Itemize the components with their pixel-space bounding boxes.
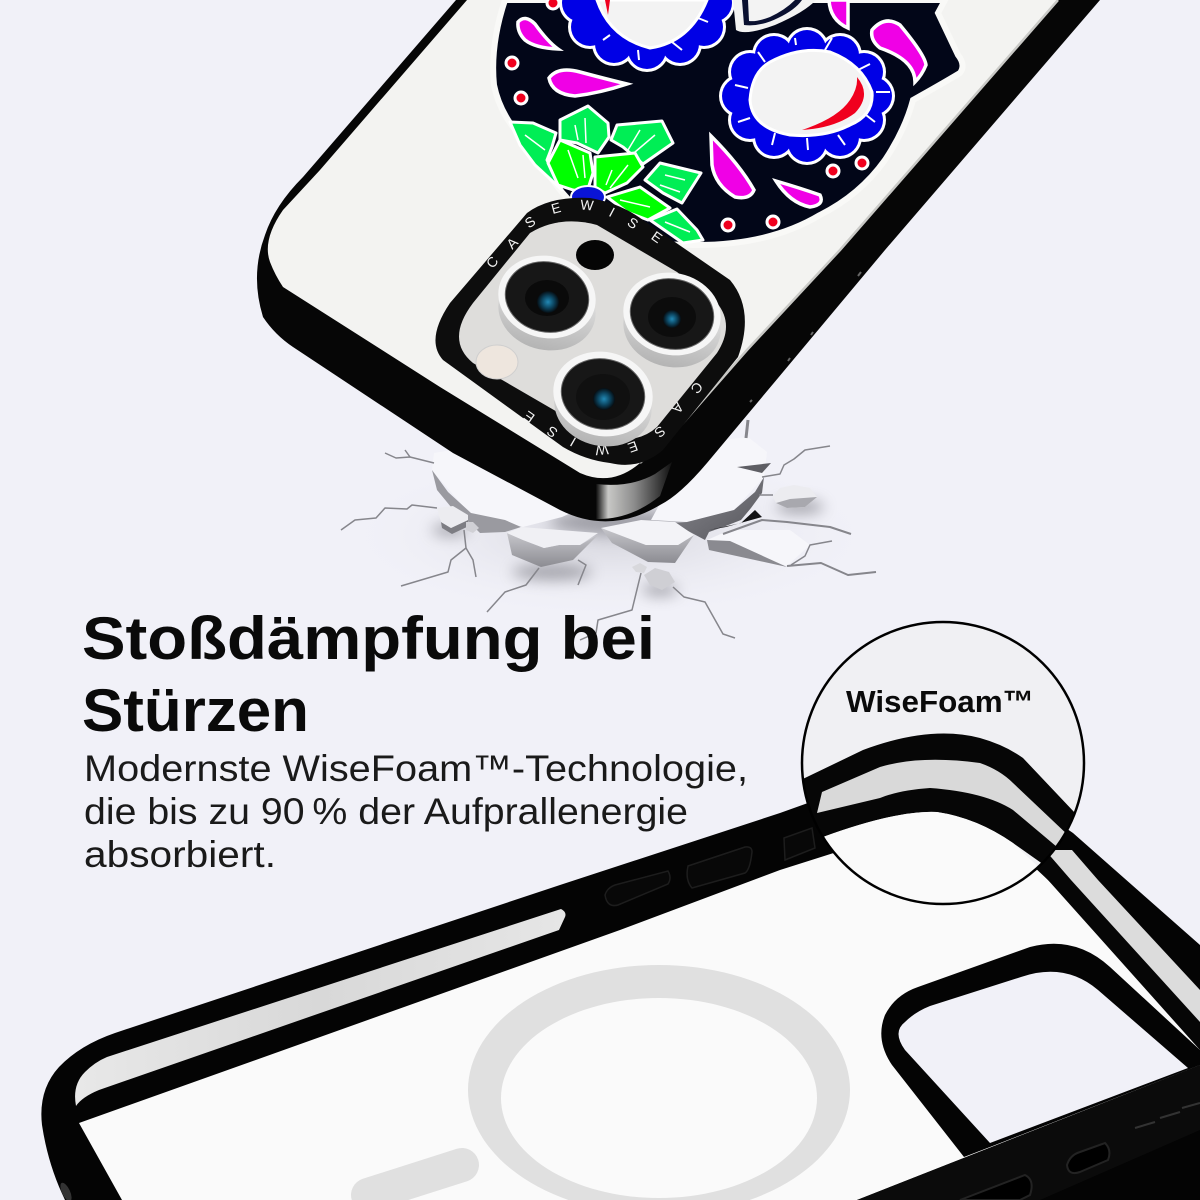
skull silhouette [493, 0, 963, 245]
nose [733, 0, 816, 32]
foam strip right [1045, 850, 1200, 1022]
rock chunks [437, 485, 817, 590]
edge highlight [640, 0, 1058, 463]
ring brand text bottom: S [544, 423, 560, 441]
ring brand text bottom: E [626, 438, 640, 456]
red dots [506, 0, 868, 231]
magnified frame corner [804, 734, 1074, 902]
ring brand text bottom: C [688, 379, 706, 397]
camera surround [435, 196, 745, 465]
crack lines [341, 420, 876, 640]
description text: absorbiert. [84, 834, 276, 875]
left eye [559, 0, 735, 72]
ring brand text bottom [521, 379, 706, 459]
ring brand text top: C [483, 253, 501, 271]
ring brand text top: S [522, 213, 538, 231]
microphone hole [576, 240, 614, 270]
flower veins [525, 118, 690, 232]
ring brand text top: S [625, 214, 641, 232]
description text: Modernste WiseFoam™-Technologie, [84, 748, 748, 789]
ring brand text bottom: E [521, 408, 537, 426]
green flower [510, 106, 703, 243]
ring brand text top: I [607, 204, 617, 220]
ring brand text top: A [503, 234, 521, 252]
inner rim, right side [1020, 850, 1200, 1050]
broken ground surfaces [432, 437, 810, 566]
crack walls [432, 463, 787, 567]
camera cutout frame [881, 944, 1200, 1157]
illustration: cracked ground impact [340, 420, 880, 640]
heading: Stoßdämpfung bei [82, 605, 655, 672]
ring brand text top: W [580, 196, 595, 214]
lens bottom [545, 343, 661, 455]
side buttons [605, 828, 815, 906]
magenta drops [518, 0, 926, 207]
heading: Stürzen [82, 677, 309, 744]
camera ring [435, 198, 745, 465]
MagSafe alignment pill [368, 1165, 462, 1195]
ring brand text top: E [649, 228, 665, 246]
ring brand text bottom: S [651, 423, 669, 441]
bumper highlight [596, 462, 672, 519]
phone bumper [257, 0, 1100, 521]
ring brand text bottom: W [594, 441, 609, 459]
soft chunk shadows [432, 500, 824, 596]
callout label: WiseFoam™ [846, 684, 1034, 719]
callout disc [802, 622, 1084, 904]
description text [84, 748, 748, 875]
case frame [41, 761, 1200, 1200]
lens top left [491, 247, 603, 359]
crack shadow [340, 450, 880, 620]
flash [476, 345, 518, 379]
phone with sugar skull case [257, 0, 1100, 521]
right eye [719, 27, 895, 165]
zoom callout circle [800, 620, 1086, 906]
description text: die bis zu 90 % der Aufprallenergie [84, 791, 688, 832]
flower center [571, 186, 605, 208]
magnified foam [817, 760, 1070, 847]
lens top right [616, 264, 728, 376]
MagSafe ring [468, 965, 850, 1200]
ring brand text bottom: A [668, 399, 687, 417]
ring brand text top [483, 196, 665, 271]
open phone case with MagSafe ring [41, 761, 1200, 1200]
ring brand text top: E [549, 199, 563, 217]
ring brand text bottom: I [567, 434, 579, 450]
camera cutout [898, 972, 1188, 1143]
case back [268, 0, 1058, 478]
bottom frame details [58, 1065, 1200, 1200]
callout outline [802, 622, 1084, 904]
MagSafe ring inner [501, 998, 817, 1198]
camera plate [459, 221, 726, 440]
case interior [79, 822, 1200, 1200]
sugar skull [493, 0, 963, 245]
heading [82, 605, 655, 744]
foam strip top [75, 909, 565, 1106]
side button detail [750, 272, 861, 402]
